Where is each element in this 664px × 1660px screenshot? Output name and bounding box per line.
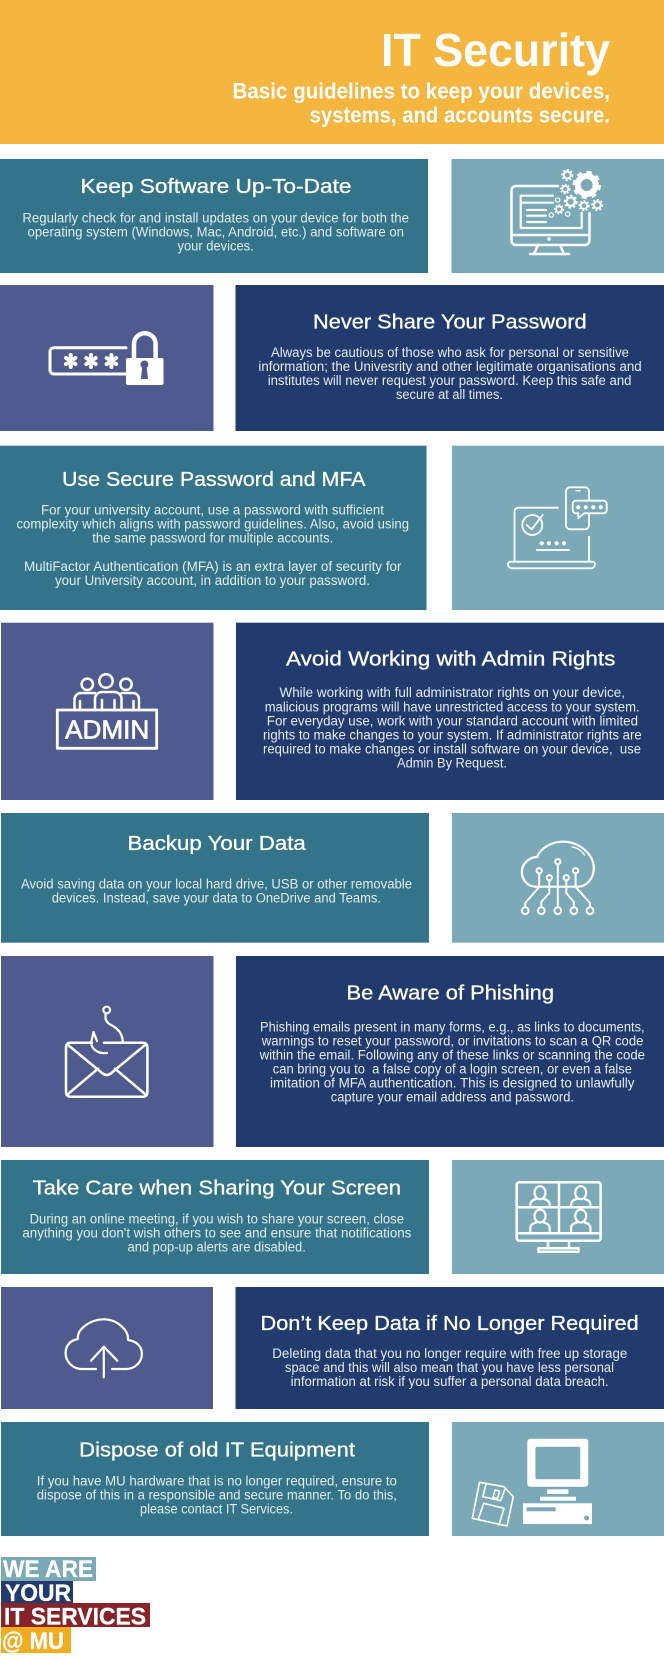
panel: MFA icon tile — [452, 446, 664, 610]
panel: password icon tile — [0, 285, 214, 431]
body text: operating system (Windows, Mac, Android, etc.) and software on — [28, 224, 404, 239]
body text: During an online meeting, if you wish to share your screen, close — [30, 1212, 404, 1227]
body text: can bring you to a false copy of a login screen, or even a false — [273, 1061, 632, 1076]
body text: If you have MU hardware that is no longer required, ensure to — [37, 1474, 397, 1489]
body text: please contact IT Services. — [140, 1502, 293, 1517]
body text: rights to make changes to your system. If administrator rights are — [263, 727, 642, 742]
icon: old computer and floppy disk — [472, 1439, 592, 1526]
body text: anything you don't wish others to see and ensure that notifications — [22, 1226, 412, 1241]
panel: don't keep data if no longer required — [236, 1287, 664, 1409]
body text: and pop-up alerts are disabled. — [128, 1240, 306, 1255]
body text — [22, 1212, 412, 1255]
body text: Avoid saving data on your local hard drive, USB or other removable — [21, 876, 412, 891]
body text: imitation of MFA authentication. This is designed to unlawfully — [270, 1075, 635, 1090]
panel: be aware of phishing — [236, 956, 664, 1147]
subtitle: Basic guidelines to keep your devices, — [232, 79, 610, 104]
body text: your University account, in addition to your password. — [55, 573, 370, 588]
logo line: IT services: IT SERVICES — [4, 1604, 146, 1631]
body text — [22, 210, 409, 254]
body text: For your university account, use a password with sufficient — [41, 503, 384, 518]
heading: Use Secure Password and MFA — [62, 468, 366, 491]
heading: Be Aware of Phishing — [346, 981, 554, 1004]
panel: keep software up-to-date — [0, 159, 428, 273]
icon: cloud circuit — [522, 842, 594, 914]
heading: Dispose of old IT Equipment — [79, 1439, 355, 1462]
body text — [263, 685, 642, 771]
gears — [549, 170, 602, 217]
panel: backup your data — [1, 813, 429, 943]
heading: Keep Software Up-To-Date — [80, 175, 352, 198]
body text — [16, 503, 409, 588]
body text — [259, 1019, 645, 1105]
header banner — [0, 0, 664, 144]
body text: warnings to reset your password, or invitations to scan a QR code — [261, 1033, 643, 1048]
heading: Backup Your Data — [128, 832, 306, 855]
body text: capture your email address and password. — [331, 1090, 574, 1105]
panel: cloud data icon tile — [452, 813, 664, 943]
body text: your devices. — [178, 239, 254, 254]
logo line: we are: WE ARE — [3, 1556, 93, 1583]
body text: secure at all times. — [396, 387, 503, 402]
body text: institutes will never request your password. Keep this safe and — [268, 373, 632, 388]
panel: take care when sharing your screen — [1, 1160, 429, 1274]
body text — [37, 1474, 397, 1517]
panel: video call icon tile — [452, 1160, 664, 1274]
icon: password field and padlock — [50, 333, 164, 385]
body text: devices. Instead, save your data to OneDrive and Teams. — [52, 890, 381, 905]
body text: space and this will also mean that you have less personal — [285, 1360, 614, 1375]
logo line: @ MU: @ MU — [2, 1628, 64, 1655]
panel: phishing icon tile — [1, 956, 214, 1147]
body text: information; the Univesrity and other legitimate organisations and — [258, 359, 642, 374]
body text: Regularly check for and install updates on your device for both the — [22, 210, 409, 225]
subtitle: systems, and accounts secure. — [310, 103, 610, 128]
body text: required to make changes or install software on your device, use — [263, 742, 641, 757]
panel: avoid working with admin rights — [236, 623, 664, 800]
heading: Never Share Your Password — [313, 310, 587, 333]
icon: cloud with up arrow — [66, 1319, 142, 1377]
body text — [258, 345, 642, 402]
logo line: your: YOUR — [5, 1580, 71, 1607]
title: IT Security — [381, 24, 610, 76]
logo: we are your IT services @ MU — [1, 1556, 150, 1655]
panel: dispose of old IT equipment — [1, 1422, 429, 1536]
body text: MultiFactor Authentication (MFA) is an extra layer of security for — [24, 559, 402, 574]
body text: the same password for multiple accounts. — [92, 531, 333, 546]
body text: complexity which aligns with password guidelines. Also, avoid using — [16, 517, 409, 532]
panel: software icon tile — [452, 159, 664, 273]
body text: Admin By Request. — [397, 756, 507, 771]
body text: Deleting data that you no longer require with free up storage — [272, 1346, 627, 1361]
subtitle — [232, 79, 610, 128]
icon: admin group: ADMIN — [65, 714, 149, 744]
heading: Avoid Working with Admin Rights — [286, 648, 615, 671]
body text — [272, 1346, 627, 1389]
body text: Always be cautious of those who ask for personal or sensitive — [271, 345, 629, 360]
body text: While working with full administrator rights on your device, — [280, 685, 625, 700]
panel: use secure password and MFA — [0, 446, 426, 610]
icon: laptop and phone with code — [508, 487, 607, 568]
heading: Don’t Keep Data if No Longer Required — [260, 1312, 639, 1335]
body text: information at risk if you suffer a personal data breach. — [291, 1374, 609, 1389]
heading: Take Care when Sharing Your Screen — [33, 1176, 401, 1199]
panel: admin icon tile — [1, 623, 214, 800]
body text — [21, 876, 412, 905]
icon: monitor with gears — [512, 170, 602, 254]
panel: never share your password — [236, 285, 664, 431]
body text: dispose of this in a responsible and secure manner. To do this, — [37, 1488, 397, 1503]
body text: malicious programs will have unrestricted access to your system. — [265, 699, 640, 714]
panel: cloud upload icon tile — [1, 1287, 213, 1409]
icon: envelope with hook — [66, 1007, 147, 1097]
body text: within the email. Following any of these links or scanning the code — [259, 1047, 645, 1062]
panel: old computer icon tile — [452, 1422, 664, 1536]
icon: video call monitor — [517, 1182, 601, 1252]
body text: For everyday use, work with your standard account with limited — [267, 713, 638, 728]
icon: admin group — [57, 674, 157, 748]
body text: Phishing emails present in many forms, e.g., as links to documents, — [260, 1019, 645, 1034]
